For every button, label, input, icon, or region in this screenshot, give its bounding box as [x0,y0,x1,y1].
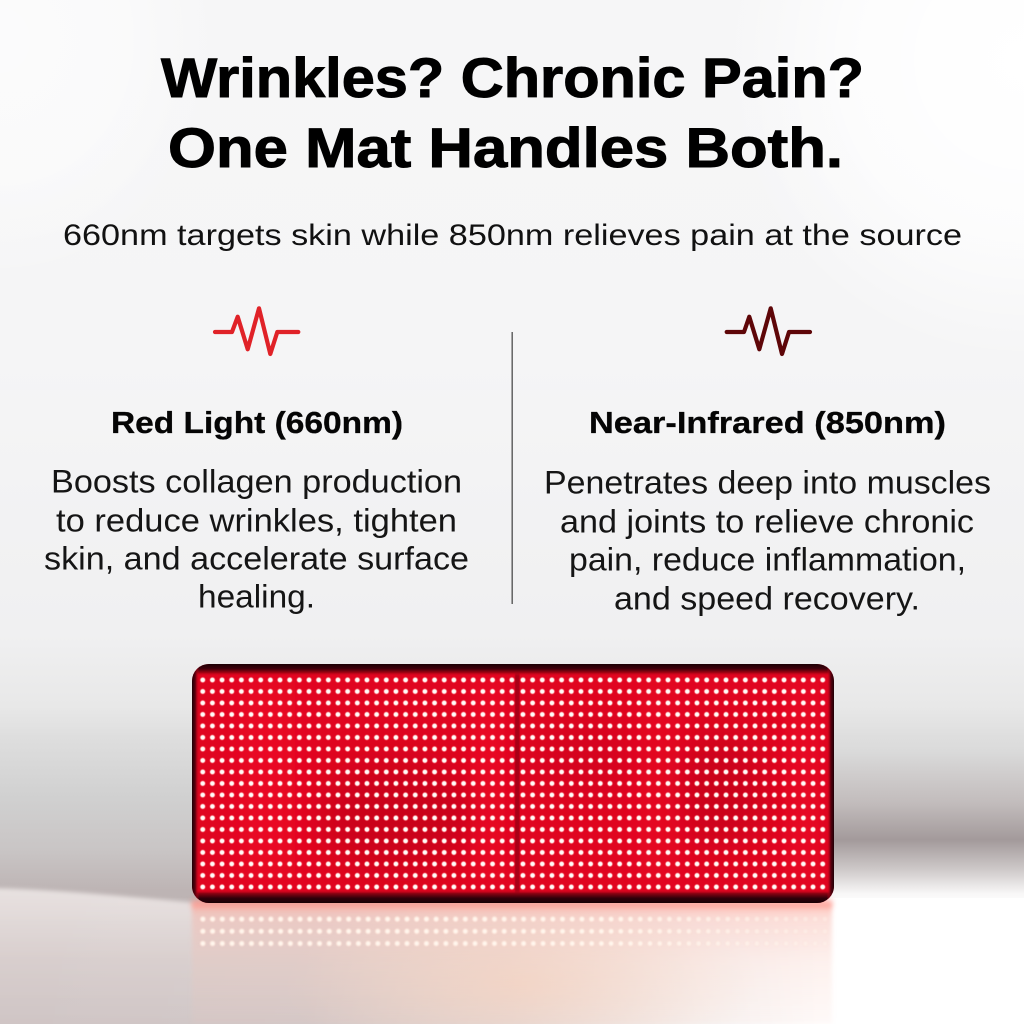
panel: near-infrared [544,405,991,616]
title: One Mat Handles Both. [168,116,843,179]
heading: near-infrared: Near-Infrared (850nm) [589,405,946,440]
column divider [512,332,513,604]
mat centre seam [515,664,520,903]
icon: red light pulse [215,308,298,354]
floor reflection of LED dots [200,916,825,946]
text block: near-infrared description: Penetrates deep into muscles [544,464,991,500]
red light therapy mat [192,664,834,903]
LED dots left panel [198,674,517,893]
text block: red light description: to reduce wrinkles, tighten [56,502,457,538]
text block: near-infrared description: and speed recovery. [614,580,920,616]
LED dots right panel [518,674,828,893]
text block: near-infrared description [544,464,991,616]
text block: red light description: Boosts collagen production [51,464,462,500]
text block: near-infrared description: and joints to relieve chronic [560,504,974,540]
title: Wrinkles? Chronic Pain? [161,46,864,109]
text block: red light description: healing. [198,578,315,614]
text block: red light description: skin, and accelerate surface [44,540,469,576]
panel: red light [44,405,469,614]
text block: red light description [44,464,469,614]
mat fabric shading [255,704,770,875]
icon: near-infrared pulse [727,308,810,354]
title [161,46,864,179]
text block: near-infrared description: pain, reduce inflammation, [569,542,966,578]
subtitle: 660nm targets skin while 850nm relieves pain at the source [63,219,962,252]
heading: red light: Red Light (660nm) [111,405,403,440]
